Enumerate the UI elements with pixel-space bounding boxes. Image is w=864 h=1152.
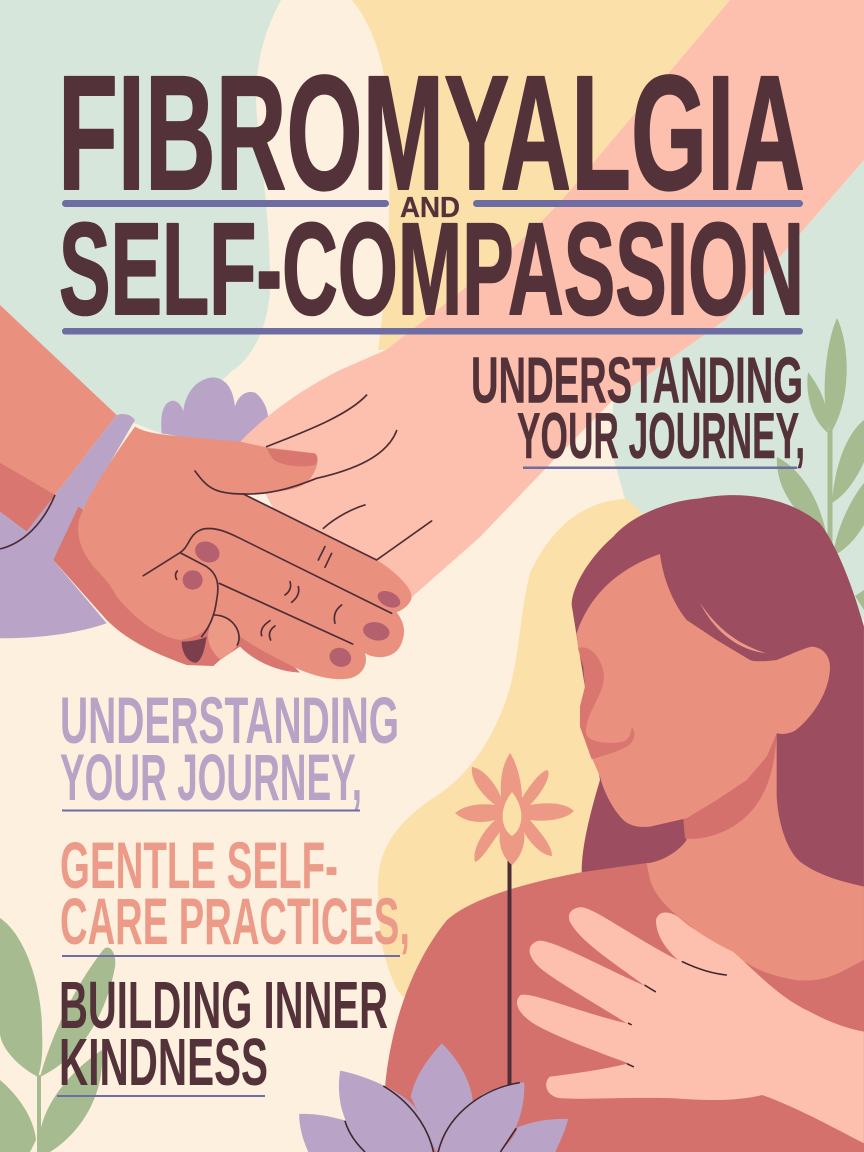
dark nail [182, 637, 207, 663]
sleeve line [0, 495, 55, 549]
illustration: lotus [299, 1043, 568, 1152]
flower stem [508, 860, 512, 1085]
title rules [62, 200, 803, 334]
illustration: purple flower behind hands [161, 377, 268, 447]
text block: building inner kindness [57, 968, 388, 1100]
eye and nose shading [578, 647, 634, 759]
flower petals [455, 753, 574, 865]
illustration: torso [385, 863, 864, 1152]
text block: understanding your journey: UNDERSTANDING [60, 683, 399, 757]
title connector: AND [400, 192, 460, 224]
illustration: hand on chest [517, 907, 864, 1143]
title [58, 41, 805, 342]
arm shadow [0, 463, 55, 532]
illustration: woman face and neck [577, 554, 864, 981]
hair highlight [700, 603, 767, 653]
flower centre [503, 792, 521, 836]
plant: top right leaves [777, 318, 864, 610]
hair [572, 495, 864, 913]
neck shadow [683, 733, 777, 839]
hand outlines [143, 395, 432, 645]
thumb nail [267, 448, 317, 466]
text block: gentle self-care practices: GENTLE SELF- [60, 828, 338, 902]
subtitle top right [471, 344, 805, 472]
thumb pad [208, 615, 240, 659]
plant: bottom left leaves [0, 918, 115, 1152]
text block: gentle self-care practices: CARE PRACTICES, [60, 884, 410, 958]
illustration: flower [455, 753, 574, 1085]
hand [78, 427, 412, 679]
arm [0, 305, 117, 532]
text block: understanding your journey: YOUR JOURNEY, [60, 740, 362, 814]
sleeve and bracelet [0, 414, 135, 638]
text block: understanding your journey [60, 683, 399, 814]
illustration: woman [572, 495, 864, 913]
text block: building inner kindness: KINDNESS [59, 1025, 268, 1100]
illustration: pale peach hand and band [239, 0, 864, 597]
text block: gentle self-care practices [60, 828, 410, 958]
face [577, 554, 830, 827]
fingernails [183, 538, 403, 670]
text block: building inner kindness: BUILDING INNER [59, 968, 388, 1043]
neck and chest [647, 733, 864, 981]
hand shadow [53, 507, 300, 673]
illustration: clasped hand group [0, 305, 432, 679]
